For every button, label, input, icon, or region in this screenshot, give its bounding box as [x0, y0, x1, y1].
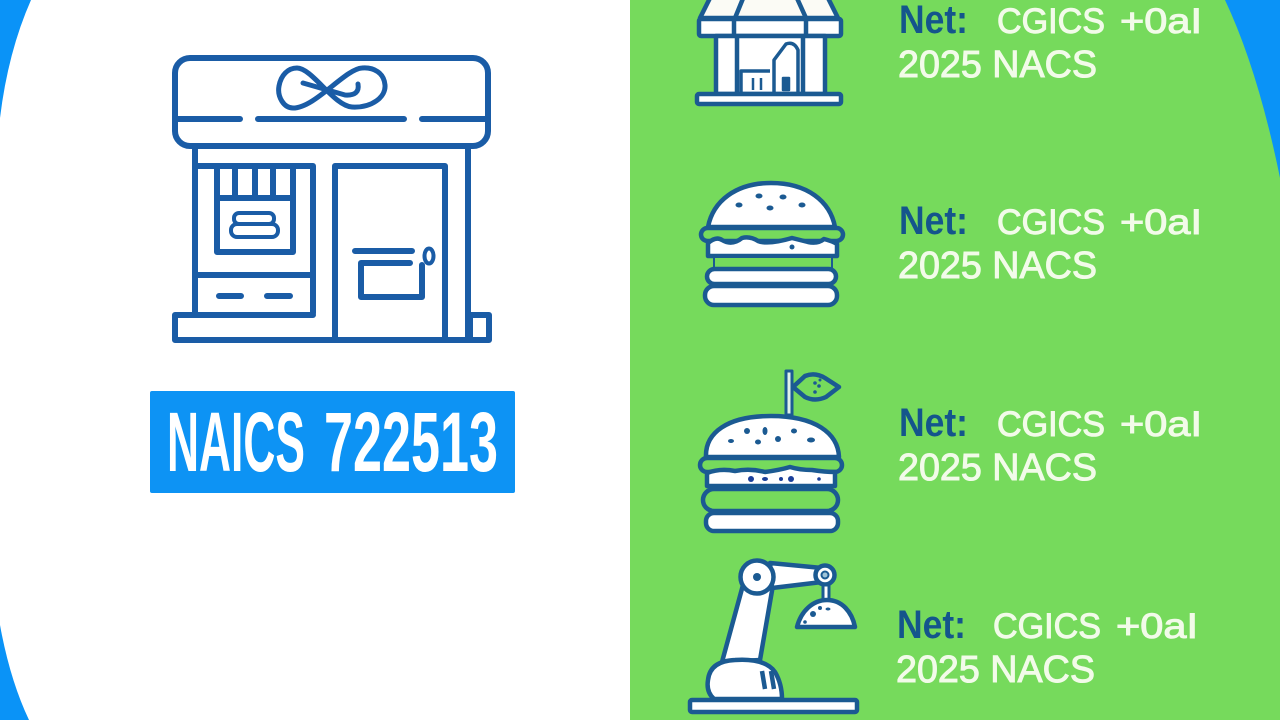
text: row 3 — [898, 401, 1202, 489]
text: row 2: +0aI — [1120, 203, 1202, 242]
text: row 4: CGICS — [993, 607, 1101, 646]
label: NAICS 722513: NAICS — [167, 395, 305, 489]
icon: burger — [701, 183, 843, 305]
text: row 4: Net: — [897, 603, 966, 647]
label: NAICS 722513 — [150, 391, 515, 493]
text: row 4: +0aI — [1116, 607, 1198, 646]
icon: gazebo with factory — [697, 0, 841, 104]
text: row 3: Net: — [899, 401, 968, 445]
text: row 1: CGICS — [997, 2, 1105, 41]
text: row 3: +0aI — [1120, 405, 1202, 444]
label: NAICS 722513: 722513 — [324, 395, 498, 489]
text: row 2: 2025 NACS — [898, 245, 1097, 287]
panel: white left panel — [0, 0, 630, 720]
text: row 2: Net: — [899, 199, 968, 243]
text: row 4 — [896, 603, 1198, 691]
icon: storefront — [175, 58, 489, 340]
text: row 3: CGICS — [997, 405, 1105, 444]
text: row 3: 2025 NACS — [898, 447, 1097, 489]
text: row 2 — [898, 199, 1202, 287]
text: row 1: 2025 NACS — [898, 44, 1097, 86]
text: row 2: CGICS — [997, 203, 1105, 242]
icon: burger with leaf flag — [700, 371, 842, 531]
text: row 1: +0aI — [1120, 2, 1202, 41]
icon: robot arm holding burger bun — [690, 560, 857, 712]
panel: green right panel — [630, 0, 1280, 720]
text: row 4: 2025 NACS — [896, 649, 1095, 691]
text: row 1 — [898, 0, 1202, 86]
